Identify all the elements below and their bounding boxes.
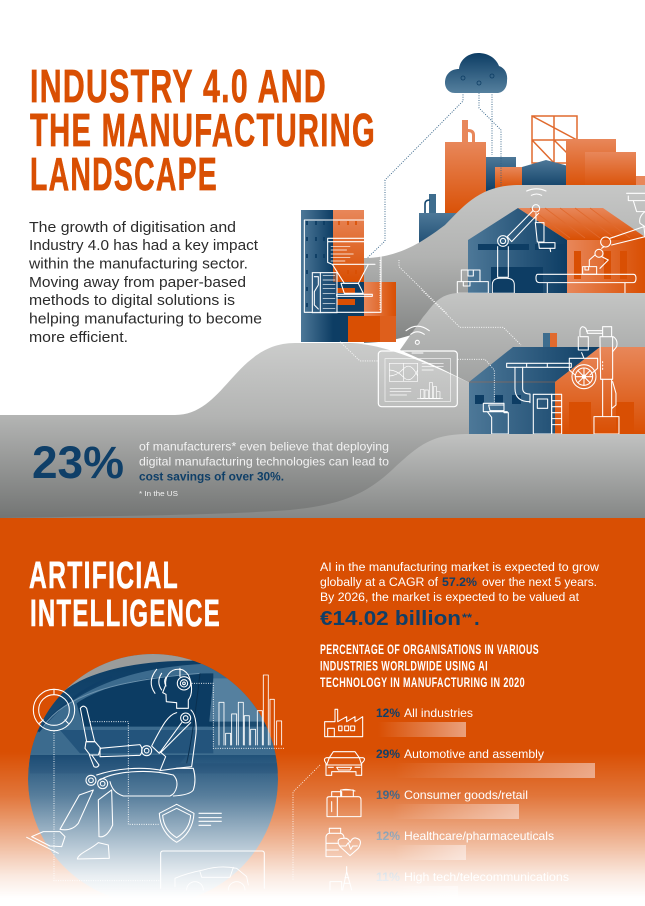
text: market growth: 57.2% [442,575,477,589]
row: automotive and assembly: 29% [376,747,400,761]
stat description: of manufacturers* even believe that deploying [139,440,389,454]
row: consumer goods/retail: 19% [376,788,400,802]
icon: toaster [327,789,361,817]
intro paragraph: within the manufacturing sector. [28,256,248,272]
icon: factory [325,709,363,737]
illustration: lower hill [0,434,645,518]
title: INDUSTRY 4.0 AND [30,60,327,112]
stat: market value: . [474,607,480,630]
icon: tablet [378,326,457,407]
panel: artificial intelligence [0,518,645,906]
row: healthcare/pharmaceuticals [376,829,554,860]
stat description: digital manufacturing technologies can lead to [139,454,389,468]
intro paragraph: Moving away from paper-based [29,274,246,291]
illustration: lower house line work [483,327,619,434]
illustration: lower house [469,333,645,434]
title [30,60,376,200]
row: automotive and assembly [376,747,595,778]
heading: chart title [320,641,539,690]
stat description: * In the US [139,489,178,498]
intro paragraph: helping manufacturing to become [29,310,262,328]
stat: market value: €14.02 billion [320,607,461,630]
effect: white fade at bottom [0,752,645,906]
row: all industries [376,706,473,737]
title: LANDSCAPE [30,148,218,200]
illustration: upper hill [345,185,645,343]
intro paragraph: The growth of digitisation and [29,219,236,236]
heading: artificial intelligence [29,555,221,635]
row: automotive and assembly: Automotive and assembly [404,747,544,761]
intro paragraph: methods to digital solutions is [29,292,235,309]
icon: tower [330,867,352,890]
icon: cloud [445,53,507,93]
connector: dotted line to chart [293,765,320,880]
stat: market value: ** [462,612,473,624]
illustration: main hill [0,343,472,518]
text: market growth [320,560,599,604]
row: consumer goods/retail: Consumer goods/retail [404,788,528,802]
text: market growth: By 2026, the market is expected to be valued at [320,590,580,604]
title: THE MANUFACTURING [30,104,376,156]
row: consumer goods/retail [376,788,528,819]
text: market growth: AI in the manufacturing market is expected to grow [320,560,599,574]
icon: car [324,752,365,775]
stat description: cost savings of over 30%. [139,470,284,484]
stat: 23%: 23% [32,437,124,488]
connector lines: cloud to factory [360,80,501,265]
row: high tech/telecommunications: 11% [376,870,400,884]
connector lines: lower hills [340,290,602,450]
figure: robot driver and instruments [27,668,285,890]
row: high tech/telecommunications: High tech/telecommunications [404,870,569,884]
circle background [28,654,278,888]
illustration: back factories [419,116,645,258]
connector lines: hills [380,260,447,313]
text: market growth: globally at a CAGR of [320,575,439,589]
chart: AI use by industry [376,706,595,901]
heading: artificial intelligence: ARTIFICIAL [29,555,179,597]
row: healthcare/pharmaceuticals: Healthcare/pharmaceuticals [404,829,554,843]
illustration: silo tower [301,210,396,342]
illustration: upper robots and conveyor [457,189,645,293]
icon: medicine and heart [326,828,360,857]
heading: chart title: INDUSTRIES WORLDWIDE USING AI [320,658,488,674]
heading: chart title: TECHNOLOGY IN MANUFACTURING IN 2020 [320,674,525,690]
illustration: silo line work [304,220,381,313]
stat description [139,440,389,498]
row: all industries: All industries [404,706,473,720]
row: all industries: 12% [376,706,400,720]
intro paragraph: more efficient. [29,329,128,346]
illustration: upper house [468,208,645,293]
row: high tech/telecommunications [376,870,569,901]
heading: artificial intelligence: INTELLIGENCE [30,593,221,635]
intro paragraph [28,219,262,346]
text: market growth: over the next 5 years. [482,575,597,589]
intro paragraph: Industry 4.0 has had a key impact [29,237,259,254]
illustration: middle hill [400,293,645,434]
row: healthcare/pharmaceuticals: 12% [376,829,400,843]
